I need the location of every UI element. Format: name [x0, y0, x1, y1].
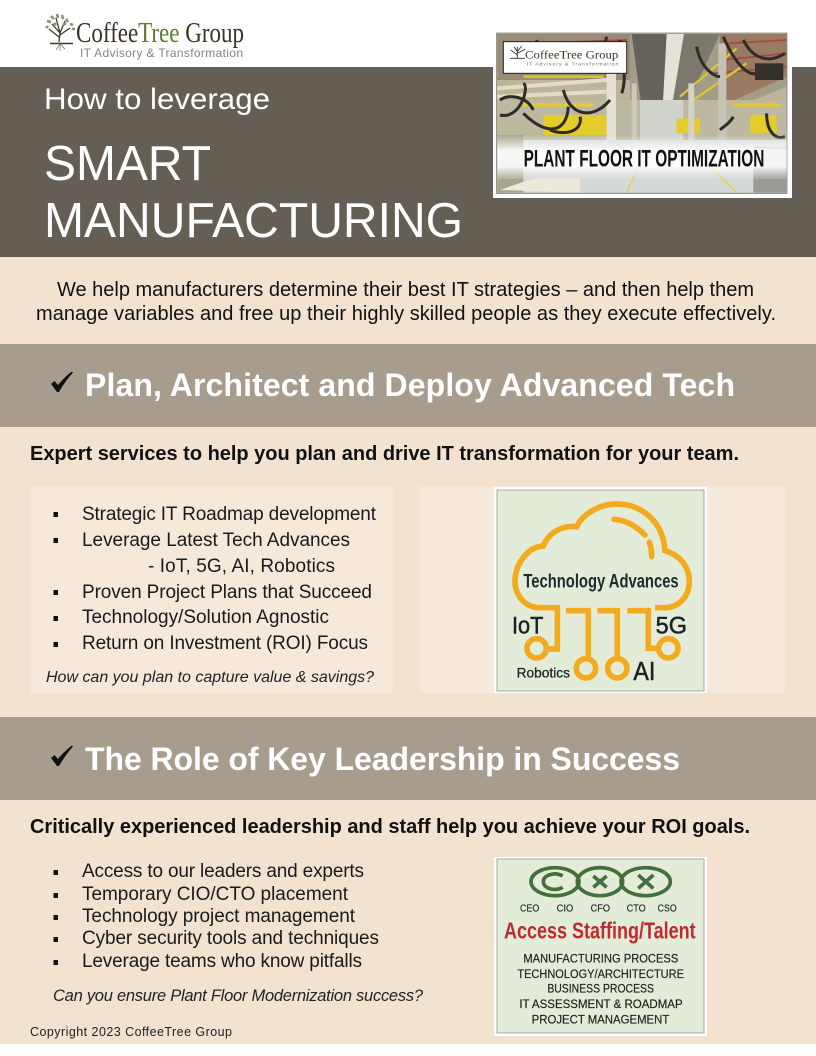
ceiling: [630, 34, 787, 130]
panel: services list: Proven Project Plans that Succeed: [82, 582, 372, 603]
diagram: technology advances cloud: 5G: [656, 612, 687, 639]
section subheading 1: Expert services to help you plan and drive IT transformation for your team.: [30, 443, 739, 465]
copyright: Copyright 2023 CoffeeTree Group: [30, 1025, 232, 1039]
panel: technology image background: [420, 486, 785, 693]
graphic: access staffing and talent: CEO: [520, 904, 540, 915]
diagram: technology advances cloud: [494, 487, 707, 693]
graphic: access staffing and talent: CTO: [627, 904, 646, 915]
yellow machines: [523, 103, 780, 135]
list: leadership services: Cyber security tools and techniques: [82, 928, 379, 949]
graphic: access staffing and talent: [494, 857, 707, 1036]
panel: services list: [30, 486, 393, 693]
logo: CoffeeTree Group: CoffeeTree Group: [76, 17, 244, 49]
panel: services list: Return on Investment (ROI) Focus: [82, 633, 368, 654]
section banner: role of key leadership: [0, 717, 816, 800]
cream page background: [0, 257, 816, 1044]
graphic: access staffing and talent: TECHNOLOGY/ARCHITECTURE: [517, 967, 684, 981]
panel: services list: Leverage Latest Tech Advances: [82, 530, 350, 551]
logo: CoffeeTree Group: IT Advisory & Transformation: [80, 46, 243, 60]
diagram: technology advances cloud: IoT: [512, 612, 544, 639]
intro text: We help manufacturers determine their best IT strategies – and then help them: [57, 279, 754, 301]
floor: [497, 140, 787, 193]
inset logo box: CoffeeTree Group: [525, 48, 618, 62]
panel: services list: Technology/Solution Agnostic: [82, 607, 329, 628]
icon: check mark: [51, 372, 73, 392]
graphic: access staffing and talent: CFO: [591, 904, 610, 915]
section banner: role of key leadership: The Role of Key Leadership in Success: [85, 741, 680, 777]
section subheading 2: Critically experienced leadership and staff help you achieve your ROI goals.: [30, 816, 750, 838]
graphic: access staffing and talent: MANUFACTURING PROCESS: [523, 952, 678, 966]
icon: CXX rings: [531, 868, 670, 896]
list: leadership services: Temporary CIO/CTO placement: [82, 884, 349, 905]
intro text: [36, 279, 776, 325]
heading: how to leverage: How to leverage: [44, 83, 270, 116]
diagram: technology advances cloud: AI: [633, 656, 655, 686]
inset logo box: [503, 42, 627, 73]
logo: CoffeeTree Group: [46, 14, 244, 60]
title: smart manufacturing: [44, 137, 463, 248]
section banner: plan, architect and deploy: Plan, Architect and Deploy Advanced Tech: [85, 367, 735, 403]
middle: [497, 100, 787, 143]
cables: [500, 37, 785, 137]
graphic: access staffing and talent: IT ASSESSMENT & ROADMAP: [519, 997, 683, 1011]
diagram: technology advances cloud: Robotics: [517, 665, 570, 681]
inset logo box: IT Advisory & Transformation: [527, 61, 619, 67]
callout question: How can you plan to capture value & savings?: [46, 669, 374, 686]
graphic: access staffing and talent: Access Staffing/Talent: [504, 917, 696, 943]
graphic: access staffing and talent: CSO: [658, 904, 677, 915]
columns: [607, 70, 616, 140]
title: smart manufacturing: SMART: [44, 137, 211, 191]
section banner: plan, architect and deploy: [0, 344, 816, 427]
list: leadership services: Technology project management: [82, 906, 356, 927]
icon: check mark: [51, 746, 73, 766]
photo: plant floor IT optimization: [493, 32, 792, 198]
list: leadership services: Access to our leaders and experts: [82, 861, 364, 882]
intro text: manage variables and free up their highly skilled people as they execute effectively.: [36, 303, 776, 325]
panel: services list: Strategic IT Roadmap development: [82, 504, 377, 525]
graphic: access staffing and talent: CIO: [557, 904, 574, 915]
graphic: access staffing and talent: PROJECT MANAGEMENT: [532, 1012, 670, 1026]
graphic: access staffing and talent: BUSINESS PROCESS: [547, 982, 654, 996]
callout question: Can you ensure Plant Floor Modernization success?: [53, 987, 424, 1005]
diagram: technology advances cloud: Technology Advances: [523, 571, 679, 592]
list: leadership services: Leverage teams who know pitfalls: [82, 951, 362, 972]
header band: [0, 67, 816, 257]
title: smart manufacturing: MANUFACTURING: [44, 194, 463, 248]
panel: services list: - IoT, 5G, AI, Robotics: [148, 556, 335, 577]
list: leadership services: [54, 861, 379, 972]
icon: tree: [46, 14, 75, 51]
